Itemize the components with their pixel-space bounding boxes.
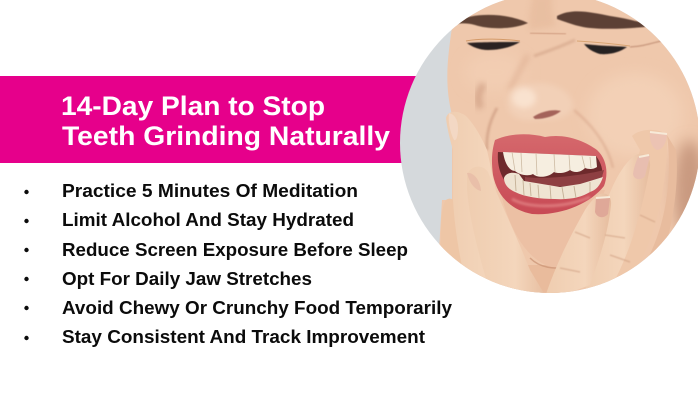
shading: cheeks, brow and creases [465, 0, 698, 240]
left hand [440, 112, 542, 293]
middle finger [587, 160, 650, 288]
bullet: jaw stretches: Opt For Daily Jaw Stretches [62, 268, 312, 289]
front finger [546, 194, 611, 300]
upper teeth [503, 152, 597, 177]
lower teeth [504, 173, 603, 199]
neck and chin [528, 258, 560, 293]
eyebrows [457, 11, 653, 29]
ring finger [446, 112, 520, 300]
heading [61, 91, 390, 151]
bullet list [24, 180, 453, 347]
heading: Teeth Grinding Naturally [62, 121, 390, 151]
bullet: meditation: Practice 5 Minutes Of Meditation [62, 180, 358, 201]
nose [508, 84, 570, 120]
fingernails [467, 173, 481, 191]
heading: 14-Day Plan to Stop [61, 91, 325, 121]
knuckle creases [560, 215, 655, 272]
outer finger [440, 198, 482, 276]
closed eyes [466, 39, 630, 54]
bullet: consistency: Stay Consistent And Track Improvement [62, 326, 425, 347]
face [436, 0, 698, 300]
bullet: chewy food: Avoid Chewy Or Crunchy Food Temporarily [62, 297, 453, 318]
lips [492, 134, 606, 214]
photo backdrop [395, 0, 698, 300]
banner [0, 76, 418, 163]
mouth [492, 134, 606, 214]
photo: woman clenching jaw in pain [395, 0, 698, 300]
lower lip highlight [512, 197, 590, 206]
bullet: screen exposure: Reduce Screen Exposure Before Sleep [62, 239, 408, 260]
far fingers [604, 130, 667, 283]
fingernails [650, 134, 666, 150]
index finger [487, 193, 542, 293]
bullet: alcohol and hydration: Limit Alcohol And Stay Hydrated [62, 209, 354, 230]
mouth interior [498, 152, 602, 197]
right hand [546, 130, 677, 300]
